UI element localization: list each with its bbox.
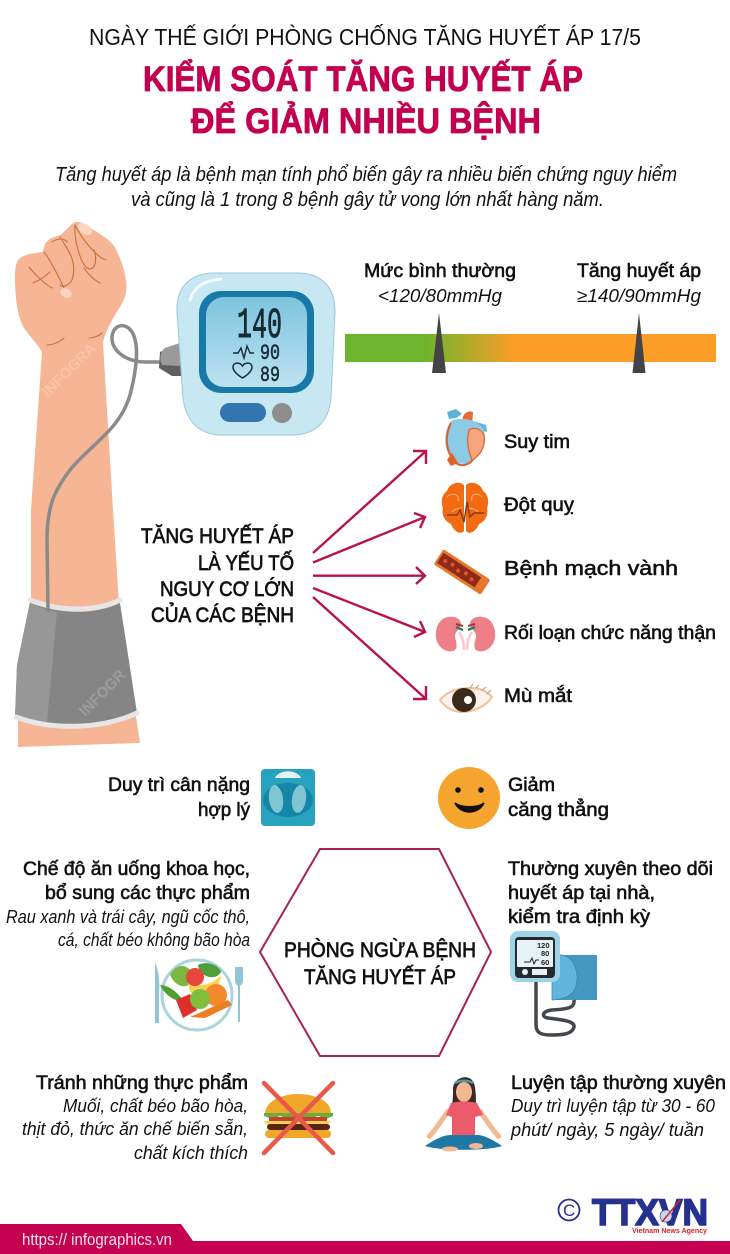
label: normal level: Mức bình thường (364, 260, 516, 282)
label: normal level (364, 260, 516, 306)
icon: home blood pressure meter: 80 (541, 949, 549, 958)
icon: kidneys (436, 617, 495, 651)
tip: reduce stress: Giảm (508, 774, 555, 796)
icon: home blood pressure meter: 120 (537, 941, 550, 950)
tip: healthy weight: Duy trì cân nặng (108, 774, 250, 796)
tip: home monitoring: kiểm tra định kỳ (508, 906, 650, 928)
icon: bathroom scale (261, 769, 315, 826)
tip: healthy weight (108, 769, 315, 826)
icon: crossed-out burger (263, 1083, 333, 1153)
tip: foods to avoid: chất kích thích (134, 1142, 248, 1163)
intro text: Tăng huyết áp là bệnh mạn tính phổ biến gây ra nhiều biến chứng nguy hiểm (55, 164, 677, 186)
label: coronary disease: Bệnh mạch vành (504, 558, 678, 580)
label: stroke: Đột quỵ (504, 494, 574, 516)
icon: brain (442, 483, 488, 533)
tube (47, 326, 162, 612)
label: hypertension level: Tăng huyết áp (577, 260, 701, 282)
footer bar with website: https:// infographics.vn (22, 1231, 172, 1249)
tip: reduce stress (438, 767, 609, 829)
label: kidney disorder: Rối loạn chức năng thận (504, 622, 716, 644)
tip: scientific diet (6, 858, 250, 1030)
copyright logo TTXVN: Vietnam News Agency (632, 1226, 708, 1235)
title: headline: ĐỂ GIẢM NHIỀU BỆNH (191, 101, 541, 141)
tip: scientific diet: Chế độ ăn uống khoa học, (23, 858, 250, 880)
cuff: INFOGR (76, 666, 129, 720)
tip: home monitoring: Thường xuyên theo dõi (508, 858, 713, 880)
tip: healthy weight: hợp lý (198, 799, 250, 821)
tip: regular exercise: Duy trì luyện tập từ 30 - 60 (511, 1095, 716, 1116)
tip: home monitoring: huyết áp tại nhà, (508, 882, 655, 904)
illustration: blood pressure monitor (159, 273, 335, 435)
icon: eye (440, 684, 492, 712)
risk factor text: CỦA CÁC BỆNH (151, 602, 294, 627)
label: normal level: <120/80mmHg (378, 285, 503, 306)
marker: hypertension (632, 313, 646, 373)
icon: blood vessel (434, 549, 490, 595)
tip: reduce stress: căng thẳng (508, 797, 609, 821)
hexagon: prevention: TĂNG HUYẾT ÁP (304, 964, 456, 989)
title: headline (143, 59, 583, 141)
illustration: arm with cuff: INFOGRA (39, 340, 100, 401)
marker: normal (432, 313, 446, 373)
icon: home blood pressure meter (510, 931, 597, 1035)
icon: meditating woman (425, 1077, 502, 1152)
tip: foods to avoid: Tránh những thực phẩm (36, 1072, 248, 1094)
illustration: blood pressure monitor: 90 (260, 341, 280, 366)
title: event line: NGÀY THẾ GIỚI PHÒNG CHỐNG TĂNG HUYẾT ÁP 17/5 (89, 23, 641, 50)
tip: regular exercise: Luyện tập thường xuyên (511, 1072, 726, 1094)
tip: home monitoring (508, 858, 713, 1035)
hexagon: prevention: PHÒNG NGỪA BỆNH (284, 937, 476, 962)
illustration: blood pressure monitor: 89 (260, 363, 280, 388)
copyright logo TTXVN: TTXVN (592, 1192, 708, 1233)
label: blindness: Mù mắt (504, 684, 573, 707)
risk factor text: LÀ YẾU TỐ (198, 549, 294, 575)
illustration: blood pressure monitor: 140 (237, 301, 282, 350)
tip: scientific diet: cá, chất béo không bão hòa (58, 929, 250, 950)
intro text: và cũng là 1 trong 8 bệnh gây tử vong lớn nhất hàng năm. (131, 189, 604, 211)
tip: foods to avoid (22, 1072, 333, 1163)
cuff (15, 600, 137, 726)
icon: smiley (438, 767, 500, 829)
title: headline: KIỂM SOÁT TĂNG HUYẾT ÁP (143, 59, 583, 99)
illustration: arm with cuff (15, 220, 162, 747)
icon: heart (445, 409, 487, 466)
icon: food plate (155, 960, 243, 1030)
copyright logo TTXVN: C (563, 1201, 575, 1220)
risk factor text (141, 523, 294, 627)
tip: regular exercise (425, 1072, 726, 1152)
label: hypertension level: ≥140/90mmHg (577, 285, 702, 306)
icon: home blood pressure meter: 60 (541, 958, 549, 967)
arrows to diseases (313, 451, 426, 699)
label: heart failure: Suy tim (504, 431, 570, 453)
label: hypertension level (577, 260, 702, 306)
tip: scientific diet: bổ sung các thực phẩm (45, 882, 250, 904)
tip: foods to avoid: thịt đỏ, thức ăn chế biến sẵn, (22, 1118, 248, 1139)
footer bar with website (0, 1224, 730, 1254)
scale: normal and hypertension levels (345, 260, 716, 373)
intro text (55, 164, 677, 211)
tip: foods to avoid: Muối, chất béo bão hòa, (63, 1095, 248, 1116)
hexagon: prevention (260, 849, 491, 1056)
gradient bar (345, 334, 716, 362)
tip: regular exercise: phút/ ngày, 5 ngày/ tuần (510, 1119, 704, 1140)
tip: scientific diet: Rau xanh và trái cây, ngũ cốc thô, (6, 906, 250, 927)
risk factor text: TĂNG HUYẾT ÁP (141, 523, 294, 548)
risk factor text: NGUY CƠ LỚN (160, 576, 294, 601)
